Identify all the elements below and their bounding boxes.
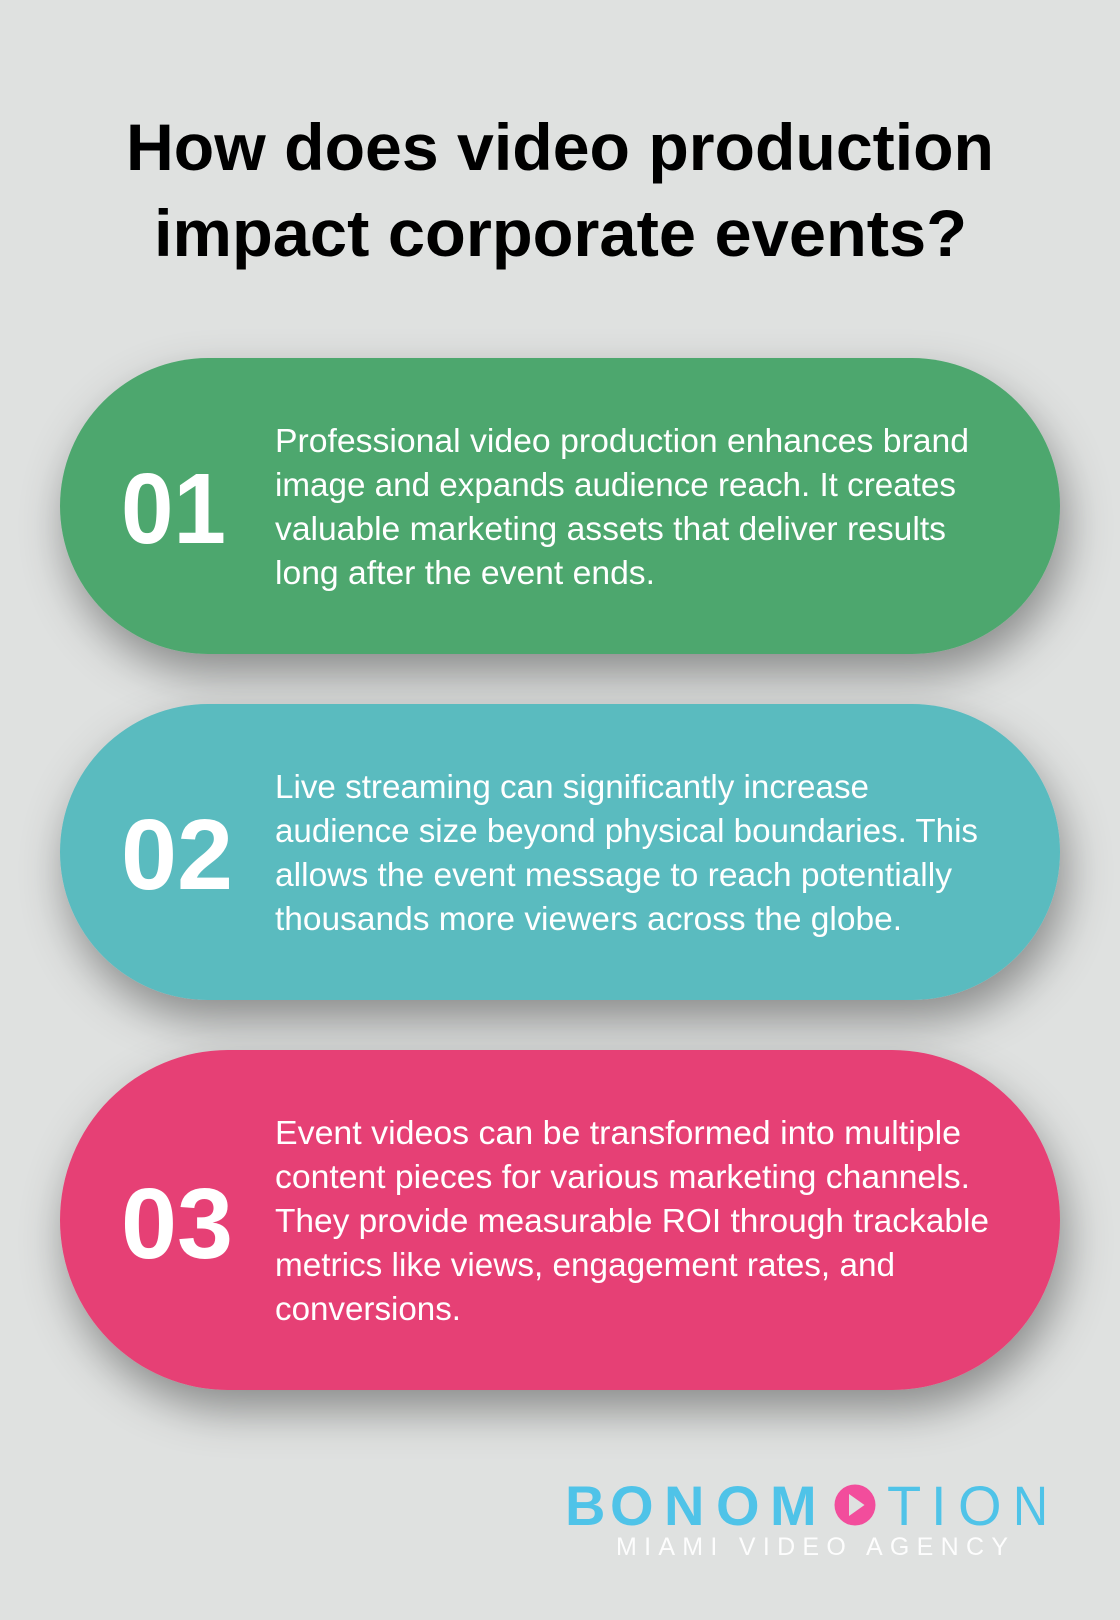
title: impact corporate events? [154,196,967,270]
panel: step 03 [60,1050,1060,1390]
panel background: pink pill [60,1050,1060,1390]
number 01: 01 [121,453,226,565]
logo tagline: MIAMI VIDEO AGENCY [616,1533,1008,1561]
panel: step 01 [60,358,1060,654]
icon: play button [834,1484,876,1526]
panel background: green pill [60,358,1060,654]
text block: step 03: content pieces for various marketing channels. [275,1158,970,1195]
text block: step 02 [275,768,978,937]
number 03: 03 [121,1168,233,1280]
text block: step 02: audience size beyond physical boundaries. This [275,812,978,849]
number 02: 02 [121,799,233,911]
text block: step 01: valuable marketing assets that deliver results [275,510,946,547]
text block: step 01: long after the event ends. [275,554,655,591]
logo wordmark [565,1474,1048,1537]
title [126,110,994,270]
logo wordmark: N [1013,1474,1048,1537]
text block: step 03: metrics like views, engagement rates, and [275,1246,895,1283]
logo wordmark: BONOM [565,1474,817,1537]
title: How does video production [126,110,994,184]
text block: step 01 [275,422,969,591]
text block: step 02: Live streaming can significantly increase [275,768,869,805]
text block: step 03: Event videos can be transformed into multiple [275,1114,961,1151]
logo: Bonomotion Miami Video Agency [565,1474,1048,1561]
text block: step 03 [275,1114,989,1327]
logo wordmark: TIO [887,1474,1002,1537]
text block: step 03: They provide measurable ROI through trackable [275,1202,989,1239]
text block: step 03: conversions. [275,1290,461,1327]
panel background: teal pill [60,704,1060,1000]
text block: step 01: image and expands audience reach. It creates [275,466,956,503]
text block: step 01: Professional video production enhances brand [275,422,969,459]
text block: step 02: thousands more viewers across the globe. [275,900,902,937]
text block: step 02: allows the event message to reach potentially [275,856,952,893]
panel: step 02 [60,704,1060,1000]
